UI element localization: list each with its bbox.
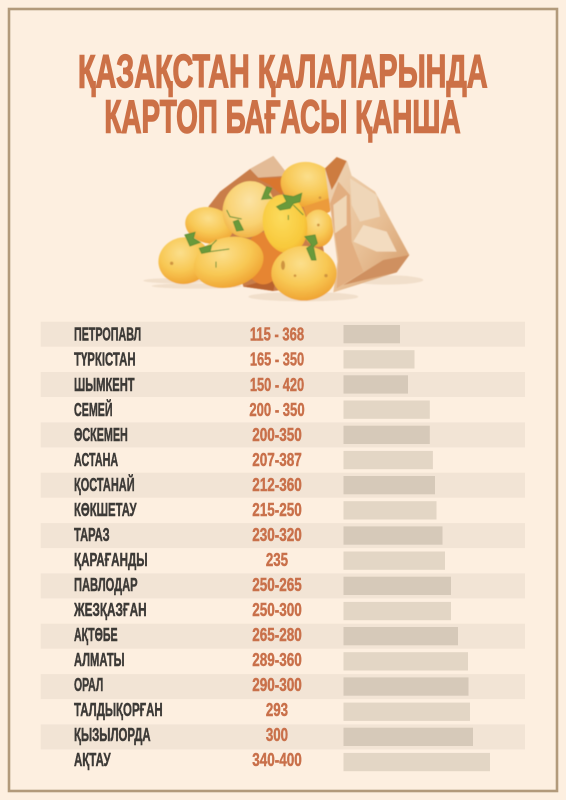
row: Орал: 290-300 xyxy=(252,675,302,695)
row: Павлодар: ПАВЛОДАР xyxy=(74,575,138,595)
row: Жезқазған: 250-300 xyxy=(252,600,302,620)
row: Көкшетау: КӨКШЕТАУ xyxy=(74,500,137,520)
orange potato behind xyxy=(245,232,282,284)
potato: top right xyxy=(275,156,341,214)
row: Шымкент: 150 - 420 xyxy=(250,375,304,395)
potato: left rear xyxy=(182,203,237,248)
row: Өскемен: ӨСКЕМЕН xyxy=(74,425,128,445)
row: Астана: 207-387 xyxy=(252,450,302,470)
row: Көкшетау: 215-250 xyxy=(252,500,302,520)
row: Шымкент xyxy=(41,372,525,397)
row: Астана: АСТАНА xyxy=(74,450,118,470)
row: Ақтөбе: АҚТӨБЕ xyxy=(74,625,118,645)
row: Тараз: 230-320 xyxy=(252,525,302,545)
parsley xyxy=(185,187,317,268)
row: Петропавл: 115 - 368 xyxy=(250,325,304,345)
row: Түркістан: ТҮРКІСТАН xyxy=(74,350,136,370)
row: Жезқазған xyxy=(73,600,451,620)
row: Петропавл xyxy=(41,322,525,347)
row: Алматы xyxy=(74,650,468,670)
row: Қарағанды xyxy=(74,550,445,570)
row: Тараз xyxy=(41,523,525,548)
row: Тараз: ТАРАЗ xyxy=(74,525,110,545)
row: Қызылорда: 300 xyxy=(266,725,288,745)
row: Шымкент: ШЫМКЕНТ xyxy=(74,375,135,395)
potato: upper left xyxy=(214,173,283,245)
sack orange inside xyxy=(303,197,334,222)
row: Алматы: АЛМАТЫ xyxy=(74,650,125,670)
row: Петропавл: ПЕТРОПАВЛ xyxy=(74,325,141,345)
row: Талдықорған: 293 xyxy=(266,700,288,720)
ground shadows xyxy=(143,275,423,301)
row: Ақтау: 340-400 xyxy=(252,750,302,770)
row: Павлодар xyxy=(41,573,525,598)
row: Қостанай: ҚОСТАНАЙ xyxy=(74,474,135,495)
row: Павлодар: 250-265 xyxy=(252,575,302,595)
row: Ақтөбе: 265-280 xyxy=(252,625,302,645)
row: Ақтөбе xyxy=(41,624,525,649)
row: Алматы: 289-360 xyxy=(252,650,302,670)
potato: far left xyxy=(155,233,214,288)
row: Қостанай: 212-360 xyxy=(252,475,302,495)
row: Ақтау xyxy=(74,750,490,771)
row: Ақтау: АҚТАУ xyxy=(74,750,111,770)
row: Семей: СЕМЕЙ xyxy=(74,399,113,420)
potato: small right xyxy=(303,210,334,247)
title xyxy=(78,45,488,143)
row: Қызылорда xyxy=(41,724,525,749)
paper bag front xyxy=(325,157,409,292)
potato: front right xyxy=(271,246,337,301)
row: Семей: 200 - 350 xyxy=(249,400,305,420)
row: Орал xyxy=(41,674,525,699)
row: Жезқазған: ЖЕЗҚАЗҒАН xyxy=(73,600,147,620)
potato eyes xyxy=(170,196,328,277)
back of sack xyxy=(208,156,330,291)
row: Астана xyxy=(74,450,433,470)
row: Түркістан xyxy=(74,350,414,370)
illustration: potatoes in a paper sack xyxy=(143,156,423,301)
row: Өскемен xyxy=(41,422,525,447)
row: Қарағанды: ҚАРАҒАНДЫ xyxy=(74,550,148,570)
row: Орал: ОРАЛ xyxy=(74,675,103,695)
row: Түркістан: 165 - 350 xyxy=(250,350,304,370)
row: Қостанай xyxy=(41,473,525,498)
row: Өскемен: 200-350 xyxy=(252,425,302,445)
row: Қарағанды: 235 xyxy=(266,550,288,570)
row: Қызылорда: ҚЫЗЫЛОРДА xyxy=(74,725,151,745)
potato: front middle xyxy=(188,230,269,295)
price table xyxy=(41,322,525,771)
row: Семей xyxy=(74,399,430,420)
row: Талдықорған xyxy=(74,700,470,721)
row: Талдықорған: ТАЛДЫҚОРҒАН xyxy=(74,700,163,720)
row: Көкшетау xyxy=(74,500,436,520)
potato: centre xyxy=(257,190,313,258)
